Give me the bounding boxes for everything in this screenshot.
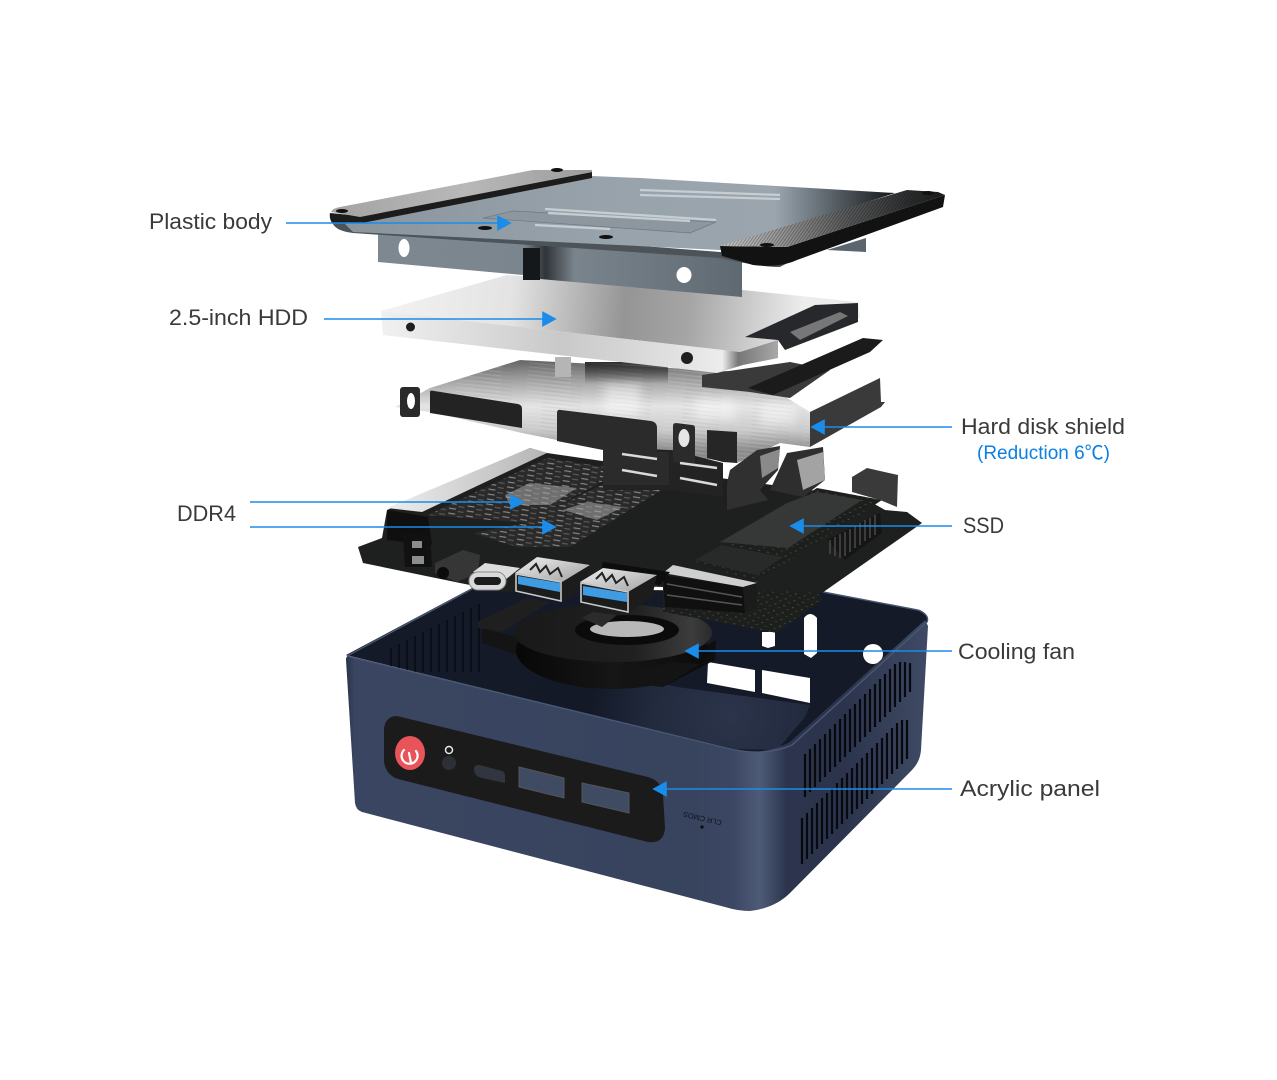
inner left wall vents: [391, 604, 479, 672]
rear wall opening left: [707, 662, 755, 692]
wall post: [523, 248, 540, 280]
port frame: [516, 574, 561, 601]
arrow lower: [250, 520, 555, 534]
fan side wall: [516, 611, 708, 689]
plate screw holes: [336, 168, 934, 247]
heat sink: [827, 513, 882, 560]
port blue tongue: [518, 576, 560, 592]
shield dark tab middle: [557, 410, 669, 485]
expansion slot top: [663, 565, 757, 587]
label text: Plastic body: [149, 209, 272, 234]
USB-A port 2: [580, 568, 657, 613]
shield center tab: [673, 423, 695, 465]
label text: SSD: [963, 513, 1004, 538]
rear wall: [378, 232, 742, 297]
mini PC case: [346, 588, 928, 911]
shield bright streaks: [605, 385, 795, 425]
arrow: [654, 782, 952, 796]
motherboard: [358, 448, 922, 633]
right strip: [720, 190, 945, 247]
rear I/O block: [403, 533, 432, 567]
plate underside rim: [332, 222, 797, 267]
port blue tongue: [583, 586, 627, 602]
arrow upper: [250, 496, 523, 508]
arrow: [812, 420, 952, 434]
wall hole left: [398, 239, 410, 257]
arrow: [791, 520, 952, 532]
rear wall small slot: [762, 632, 775, 648]
fan top face: [514, 604, 712, 662]
case rim: [347, 589, 928, 752]
power icon: [402, 750, 418, 764]
label: Plastic body: [149, 209, 510, 234]
audio jack hole: [437, 567, 449, 579]
expansion slot: [663, 575, 745, 613]
reduction note: (Reduction 6℃): [977, 443, 1110, 464]
USB-A rear slab: [600, 562, 670, 585]
SSD carrier board: [695, 488, 882, 582]
port top face: [515, 557, 590, 582]
fan right mount: [623, 662, 700, 687]
case interior: [346, 588, 928, 752]
fan right bracket back: [623, 640, 716, 687]
arrow: [286, 216, 510, 230]
USB-C tongue: [473, 563, 520, 580]
label: 2.5-inch HDD: [169, 305, 555, 330]
reset button: [442, 756, 456, 770]
2.5-inch HDD: [381, 275, 860, 373]
HDD screw hole left: [406, 322, 415, 332]
shield lower dark bracket: [603, 447, 723, 497]
hinge left: [727, 446, 780, 510]
label text: Cooling fan: [958, 639, 1075, 664]
HDD screw hole right: [681, 352, 693, 364]
HDD front face: [381, 311, 778, 373]
expansion slot side: [743, 583, 757, 613]
port zigzag mark: [530, 564, 562, 577]
port frame: [581, 583, 628, 612]
shield bracket hole tab: [400, 387, 420, 417]
rear wall opening right: [762, 670, 810, 703]
shield shadow block: [585, 362, 668, 384]
main circuit board: [358, 448, 922, 593]
SSD second chip: [695, 545, 783, 575]
plate label rectangle: [483, 211, 716, 233]
HDD connector contacts: [790, 312, 848, 340]
SSD main chip: [720, 492, 862, 548]
label: SSD: [791, 513, 1004, 538]
label: DDR4: [177, 496, 555, 534]
power button: [395, 736, 425, 770]
arrow: [686, 644, 952, 658]
acrylic panel: [384, 716, 665, 842]
DDR4 module lower: [473, 482, 665, 547]
USB port hole 2: [582, 783, 629, 813]
wall hole right: [676, 267, 692, 283]
rear I/O block details: [412, 541, 424, 564]
DDR4 module lower reflection: [563, 502, 623, 520]
shield upper dark parts: [702, 362, 830, 398]
CLR CMOS pinhole: [700, 825, 704, 829]
audio jack: [435, 550, 480, 582]
USB-C port hole: [474, 765, 505, 783]
hinge right: [770, 447, 825, 497]
shield bracket hole: [407, 393, 415, 409]
fan hub tab: [582, 612, 617, 627]
rear wall round hole: [863, 644, 883, 664]
DDR4 module upper reflection: [505, 483, 577, 505]
left strip: [331, 170, 592, 217]
label: Cooling fan: [686, 639, 1075, 664]
USB-C connector: [469, 572, 506, 590]
arrow: [324, 312, 555, 326]
shield metal: [395, 360, 810, 463]
slot lines: [667, 584, 742, 605]
HDD connector: [745, 303, 858, 350]
cooling fan: [477, 598, 716, 689]
USB port hole 1: [519, 767, 564, 798]
port shell: [515, 557, 590, 602]
top plate: [345, 176, 895, 250]
reset icon: [446, 746, 452, 754]
board black block: [387, 510, 432, 545]
shield dark tab left: [430, 391, 522, 428]
lower daughter board: [663, 587, 822, 633]
plastic body: [330, 168, 945, 297]
right face vents row 1: [805, 662, 910, 797]
USB-C opening: [474, 577, 501, 585]
port zigzag mark: [596, 573, 628, 586]
fan upper left arm: [477, 598, 550, 632]
label text: 2.5-inch HDD: [169, 305, 308, 330]
USB-A port 1: [515, 557, 590, 602]
HDD top face: [381, 275, 860, 352]
fan lower left bracket: [482, 628, 528, 658]
CLR CMOS label: CLR CMOS: [682, 810, 723, 827]
fan hub: [575, 615, 679, 645]
shield post: [555, 357, 571, 377]
case interior floor: [616, 685, 810, 750]
hinge right metal: [797, 452, 825, 490]
right face vents row 2: [802, 720, 907, 864]
label text: Hard disk shield: [961, 414, 1125, 439]
rear wall right piece: [827, 238, 866, 252]
shield rail: [748, 338, 883, 395]
plate printed text block: [535, 190, 780, 229]
hinge left metal: [760, 449, 780, 478]
hard disk shield: [395, 338, 885, 510]
label: Hard disk shield: [812, 414, 1125, 464]
shield side wall: [810, 378, 885, 447]
left strip lip: [330, 172, 592, 223]
shield right tab: [707, 430, 737, 463]
fan metal center: [590, 621, 664, 637]
right strip texture: [720, 190, 945, 247]
label text: DDR4: [177, 501, 236, 526]
label: Acrylic panel: [654, 776, 1100, 801]
rear wall slot: [804, 614, 817, 658]
board slot highlight: [622, 454, 717, 485]
label text: Acrylic panel: [960, 776, 1100, 801]
rear connector: [852, 468, 898, 507]
DDR4 module upper: [428, 458, 623, 523]
heat sink fins: [830, 515, 875, 558]
right strip lip: [720, 195, 945, 266]
shield brushed texture: [430, 360, 810, 463]
port top face: [580, 568, 657, 592]
port shell: [580, 568, 657, 613]
case body: [346, 620, 928, 911]
shield center tab hole: [678, 429, 690, 447]
board white edge: [387, 448, 547, 512]
